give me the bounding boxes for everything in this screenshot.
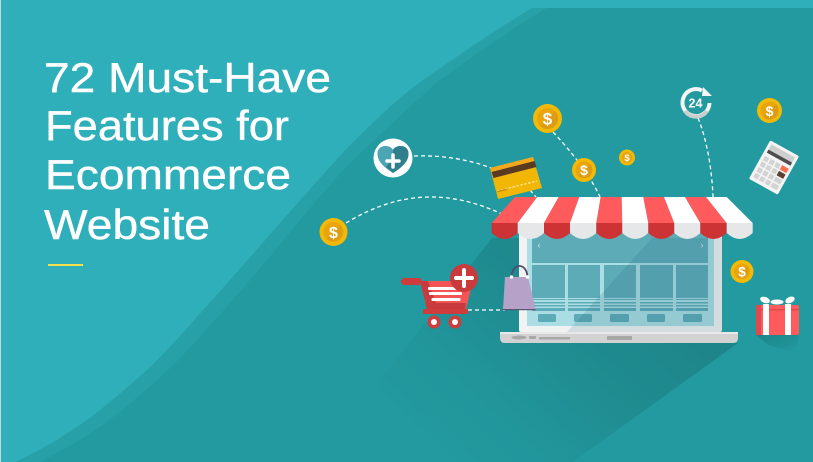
coin: left: $ [329,225,338,242]
long shadow of the store [376,238,738,462]
awning canopy stripes [492,197,753,223]
title underline accent [48,264,83,266]
coin: small: $ [624,153,630,164]
laptop storefront: › [700,240,704,250]
icon: credit card [490,157,542,199]
diagonal shadow over the screen [567,238,722,332]
laptop base [500,332,738,343]
title: Ecommerce [45,151,291,198]
laptop lid [519,225,722,332]
icon: shopping bag [503,266,536,310]
left edge strip [0,0,1,462]
title [44,54,331,248]
product grid [532,265,708,311]
coin: top center: $ [543,110,553,128]
icon: shopping cart with plus [401,264,478,328]
title: Website [44,201,210,248]
awning scallops [492,223,753,239]
coin: top right [757,98,782,123]
laptop storefront [500,225,738,343]
coin: right: $ [738,264,746,280]
icon: 24 hour support: 24 [689,96,702,110]
title: 72 Must-Have [44,54,331,101]
coin: left [320,218,348,246]
coin: near awning: $ [580,162,588,178]
icon: gift box [756,295,799,351]
title: Features for [45,102,289,149]
icon: calculator [749,140,799,195]
coin: top center [533,104,562,133]
striped awning [492,197,753,239]
dashed connector lines [346,118,713,310]
icon: 24 hour support [683,87,712,117]
laptop base highlight [500,332,738,334]
coin: top right: $ [766,103,774,119]
coin: small [619,150,635,166]
screen hero banner [532,225,708,263]
product buttons [538,314,702,322]
base details [512,336,632,340]
screen [527,225,714,326]
coin: near awning [572,158,596,182]
icon: heart with plus badge [374,138,412,178]
coin: right [730,260,754,283]
slider arrows: ‹ [538,240,540,250]
